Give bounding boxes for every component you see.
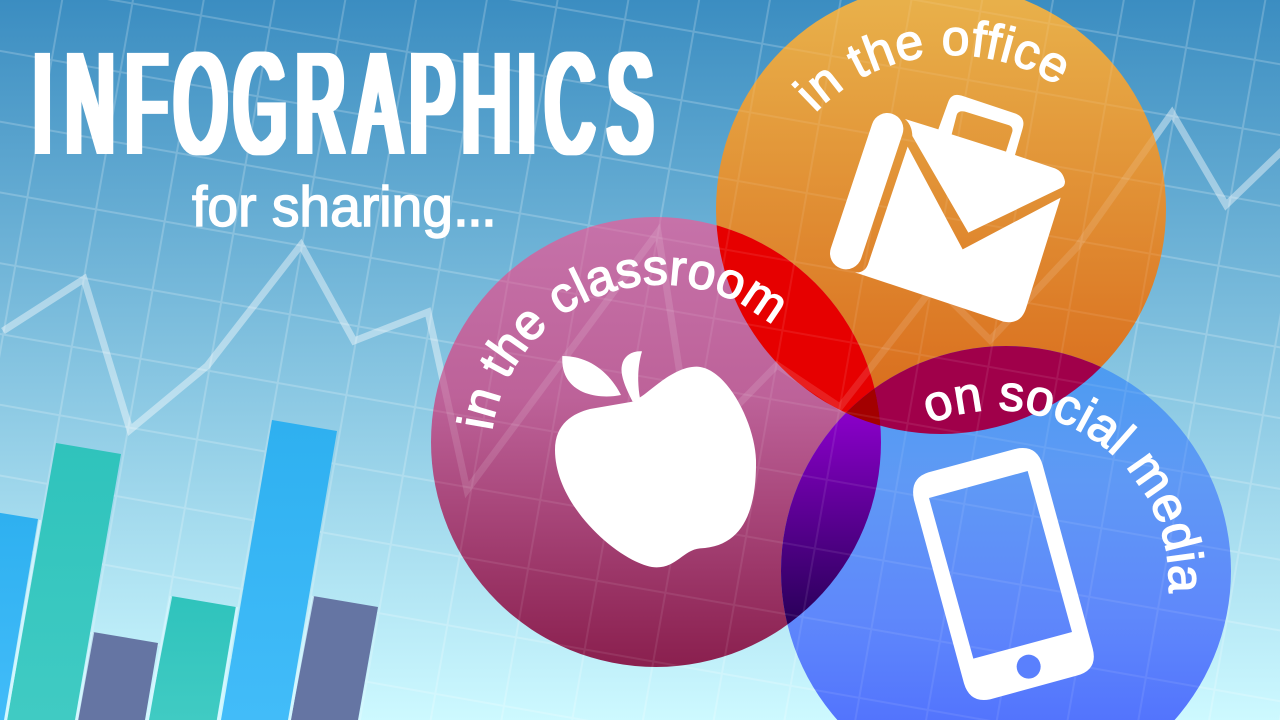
title: INFOGRAPHICS — [33, 22, 652, 184]
overlap: classroom and social — [781, 388, 881, 624]
grid and line seen through circles — [434, 0, 1230, 720]
bar chart — [0, 420, 378, 720]
label: in the office: in the office — [791, 20, 1066, 112]
overlap: all three circles — [846, 388, 880, 426]
circle: in the office — [716, 0, 1166, 434]
circle: on social media — [781, 346, 1231, 720]
label: on social media: on social media — [925, 383, 1205, 594]
icon: apple — [555, 351, 756, 567]
circle: in the classroom — [431, 217, 881, 667]
icon: smartphone — [913, 448, 1094, 700]
subtitle: for sharing — [192, 175, 453, 239]
line chart — [3, 113, 1280, 490]
overlap: office and classroom — [716, 225, 874, 413]
overlap: office and social — [850, 346, 1101, 434]
label: in the classroom: in the classroom — [456, 256, 784, 429]
icon: briefcase — [846, 95, 1065, 322]
subtitle: ... — [453, 175, 497, 239]
